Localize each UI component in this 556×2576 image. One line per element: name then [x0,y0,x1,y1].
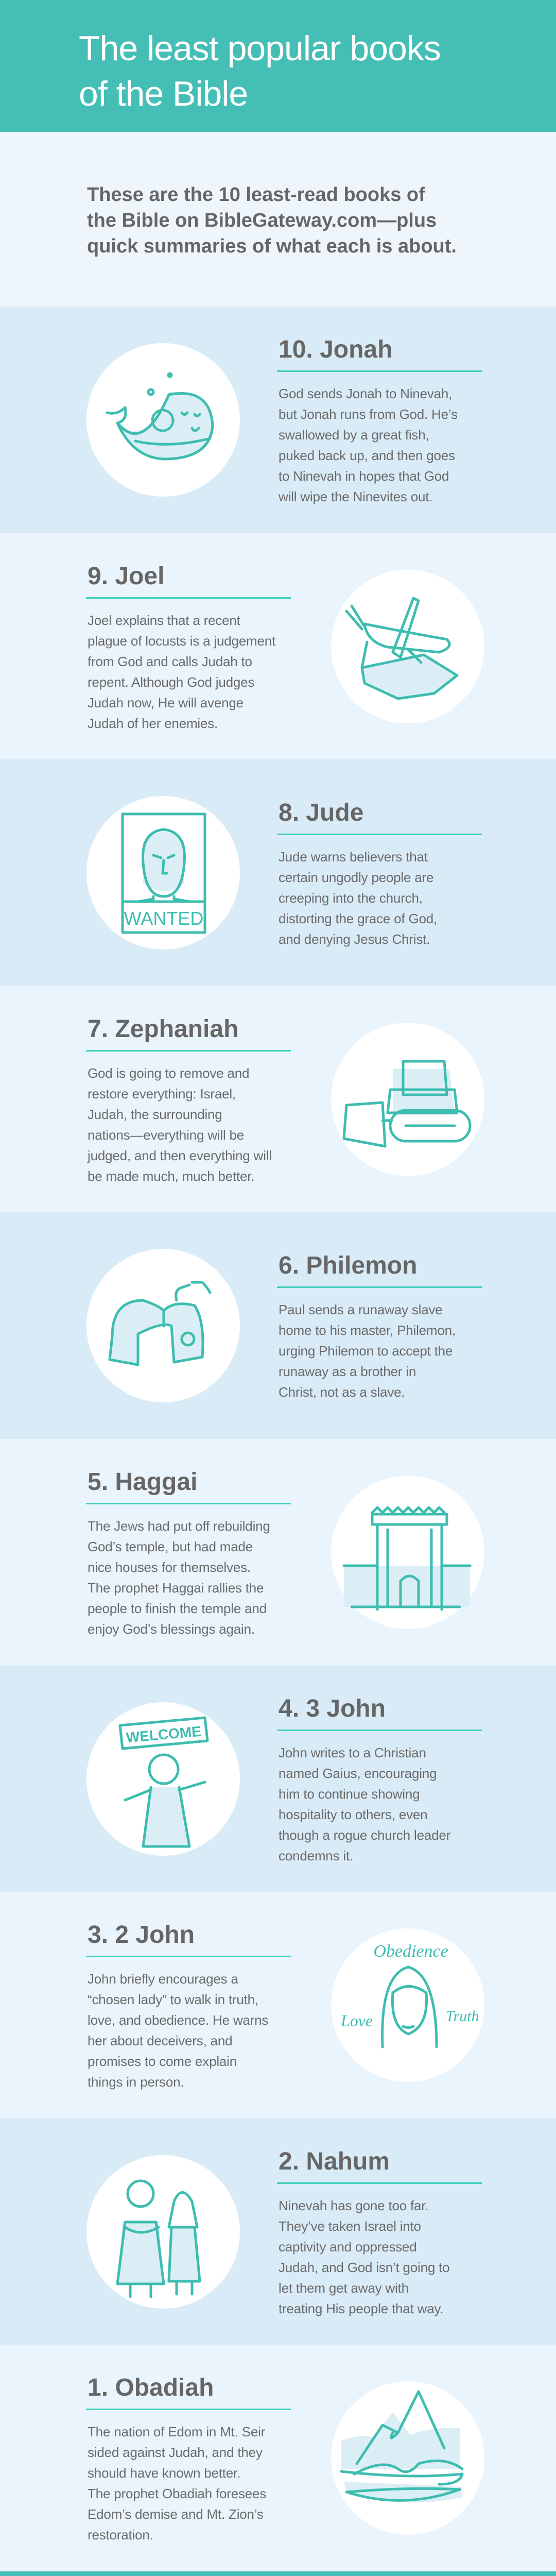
text: Jonah: to Ninevah in hopes that God [279,468,449,483]
text: Haggai: The prophet Haggai rallies the [88,1580,264,1595]
text: Philemon: runaway as a brother in [279,1363,416,1379]
text: Haggai [86,1468,291,1636]
panel: 1 Obadiah [0,2345,556,2571]
text: Jude: and denying Jesus Christ. [279,931,430,947]
text: Haggai: 5. Haggai [88,1468,197,1495]
icon: welcome figure [86,1702,240,1856]
text: Zephaniah: 7. Zephaniah [88,1015,238,1043]
text: 3 John: 4. 3 John [279,1695,386,1722]
text: Obadiah: 1. Obadiah [88,2374,214,2401]
text: Nahum: let them get away with [279,2280,409,2296]
text: Joel: repent. Although God judges [88,674,254,689]
title: of the Bible [79,74,248,113]
text: 2 John: John briefly encourages a [88,1971,238,1987]
text: 2 John: promises to come explain [88,2054,237,2069]
panel: 7 Zephaniah [0,986,556,1212]
text: Jonah: but Jonah runs from God. He’s [279,406,458,421]
text: Obadiah: restoration. [88,2527,153,2542]
panel: 4 3 John [0,1666,556,1892]
text: 3 John: hospitality to others, even [279,1806,427,1822]
icon: lady with words: Love [340,2011,373,2030]
text: Philemon: 6. Philemon [279,1252,417,1279]
panel: 9 Joel [0,533,556,759]
panel: 3 2 John [0,1892,556,2119]
panel: 6 Philemon [0,1212,556,1439]
text: Jonah: swallowed by a great fish, [279,427,429,442]
text: Obadiah: should have known better. [88,2465,240,2480]
text: Jonah: God sends Jonah to Ninevah, [279,385,452,401]
text: Zephaniah: judged, and then everything will [88,1148,272,1163]
icon: two captives [86,2155,240,2309]
intro text: These are the 10 least-read books of [87,184,425,206]
intro text [87,184,457,257]
panel: 10 Jonah [0,307,556,533]
text: Zephaniah: be made much, much better. [88,1168,254,1184]
text: 3 John [277,1695,482,1863]
text: Nahum [277,2147,482,2316]
text: Haggai: enjoy God’s blessings again. [88,1621,255,1636]
text: Haggai: The Jews had put off rebuilding [88,1518,270,1533]
icon: temple [331,1476,484,1629]
icon: mountains [331,2381,484,2535]
intro panel [0,132,556,307]
text: Joel: Judah now, He will avenge [88,694,244,710]
text: Nahum: captivity and oppressed [279,2239,417,2255]
text: Obadiah: Edom’s demise and Mt. Zion’s [88,2506,264,2521]
text: 2 John: love, and obedience. He warns [88,2012,268,2028]
text: Zephaniah [86,1015,291,1184]
icon: welcome figure: WELCOME [126,1723,202,1745]
text: 3 John: John writes to a Christian [279,1744,426,1760]
title: The least popular books [79,29,441,68]
text: Haggai: people to finish the temple and [88,1600,267,1616]
text: Jude: Jude warns believers that [279,849,428,865]
intro text: the Bible on BibleGateway.com—plus [87,210,437,231]
text: Jude: creeping into the church, [279,890,423,906]
text: Nahum: Judah, and God isn’t going to [279,2260,449,2275]
text: Jude: 8. Jude [279,799,363,826]
text: Joel [86,563,291,731]
footer [0,2571,556,2576]
text: Zephaniah: God is going to remove and [88,1065,249,1081]
text: Joel: 9. Joel [88,563,164,589]
icon: broken shackle [86,1249,240,1402]
text: 2 John [86,1921,291,2090]
text: Nahum: They’ve taken Israel into [279,2218,421,2234]
text: Philemon: Christ, not as a slave. [279,1384,405,1399]
header [0,0,556,132]
text: 2 John: things in person. [88,2074,184,2090]
icon: lady with words: Truth [445,2008,479,2025]
text: 2 John: “chosen lady” to walk in truth, [88,1992,258,2007]
icon: bulldozer [331,1023,484,1176]
panel: 5 Haggai [0,1439,556,1666]
icon: wanted poster [86,796,240,950]
icon: lady with words: Obedience [373,1942,448,1961]
text: Jonah: puked back up, and then goes [279,447,455,463]
panel: 2 Nahum [0,2119,556,2345]
text: 2 John: her about deceivers, and [88,2033,232,2048]
icon: locust [331,570,484,723]
text: Obadiah [86,2374,291,2542]
text: Jonah [277,336,482,504]
icon: wanted poster: WANTED [124,908,203,929]
text: Philemon: home to his master, Philemon, [279,1322,456,1337]
icon: lady with words [331,1928,484,2082]
text: Haggai: nice houses for themselves. [88,1559,251,1574]
text: Zephaniah: Judah, the surrounding [88,1107,222,1122]
text: Nahum: treating His people that way. [279,2301,443,2316]
text: Haggai: God’s temple, but had made [88,1538,253,1554]
text: Jude [277,799,482,947]
text: Joel: plague of locusts is a judgement [88,633,275,648]
text: Joel: Judah of her enemies. [88,715,218,731]
text: 3 John: named Gaius, encouraging [279,1765,437,1781]
text: 3 John: condemns it. [279,1848,353,1863]
text: Jude: distorting the grace of God, [279,911,437,926]
intro text: quick summaries of what each is about. [87,235,457,257]
title [79,29,441,113]
text: 2 John: 3. 2 John [88,1921,195,1948]
text: Zephaniah: nations—everything will be [88,1127,244,1143]
panel: 8 Jude [0,759,556,986]
text: Joel: Joel explains that a recent [88,612,240,628]
text: Zephaniah: restore everything: Israel, [88,1086,236,1101]
text: 3 John: though a rogue church leader [279,1827,450,1842]
text: Nahum: 2. Nahum [279,2147,390,2175]
text: Joel: from God and calls Judah to [88,653,252,669]
text: Jonah: will wipe the Ninevites out. [279,488,432,504]
icon: whale [86,343,240,497]
text: Obadiah: The prophet Obadiah foresees [88,2485,266,2501]
text: Philemon: Paul sends a runaway slave [279,1301,443,1317]
text: Obadiah: The nation of Edom in Mt. Seir [88,2424,265,2439]
text: Jude: certain ungodly people are [279,870,433,885]
text: Jonah: 10. Jonah [279,336,392,363]
text: Philemon: urging Philemon to accept the [279,1343,453,1358]
text: Nahum: Ninevah has gone too far. [279,2198,428,2213]
text: 3 John: him to continue showing [279,1786,420,1801]
text: Philemon [277,1252,482,1399]
text: Obadiah: sided against Judah, and they [88,2444,263,2460]
